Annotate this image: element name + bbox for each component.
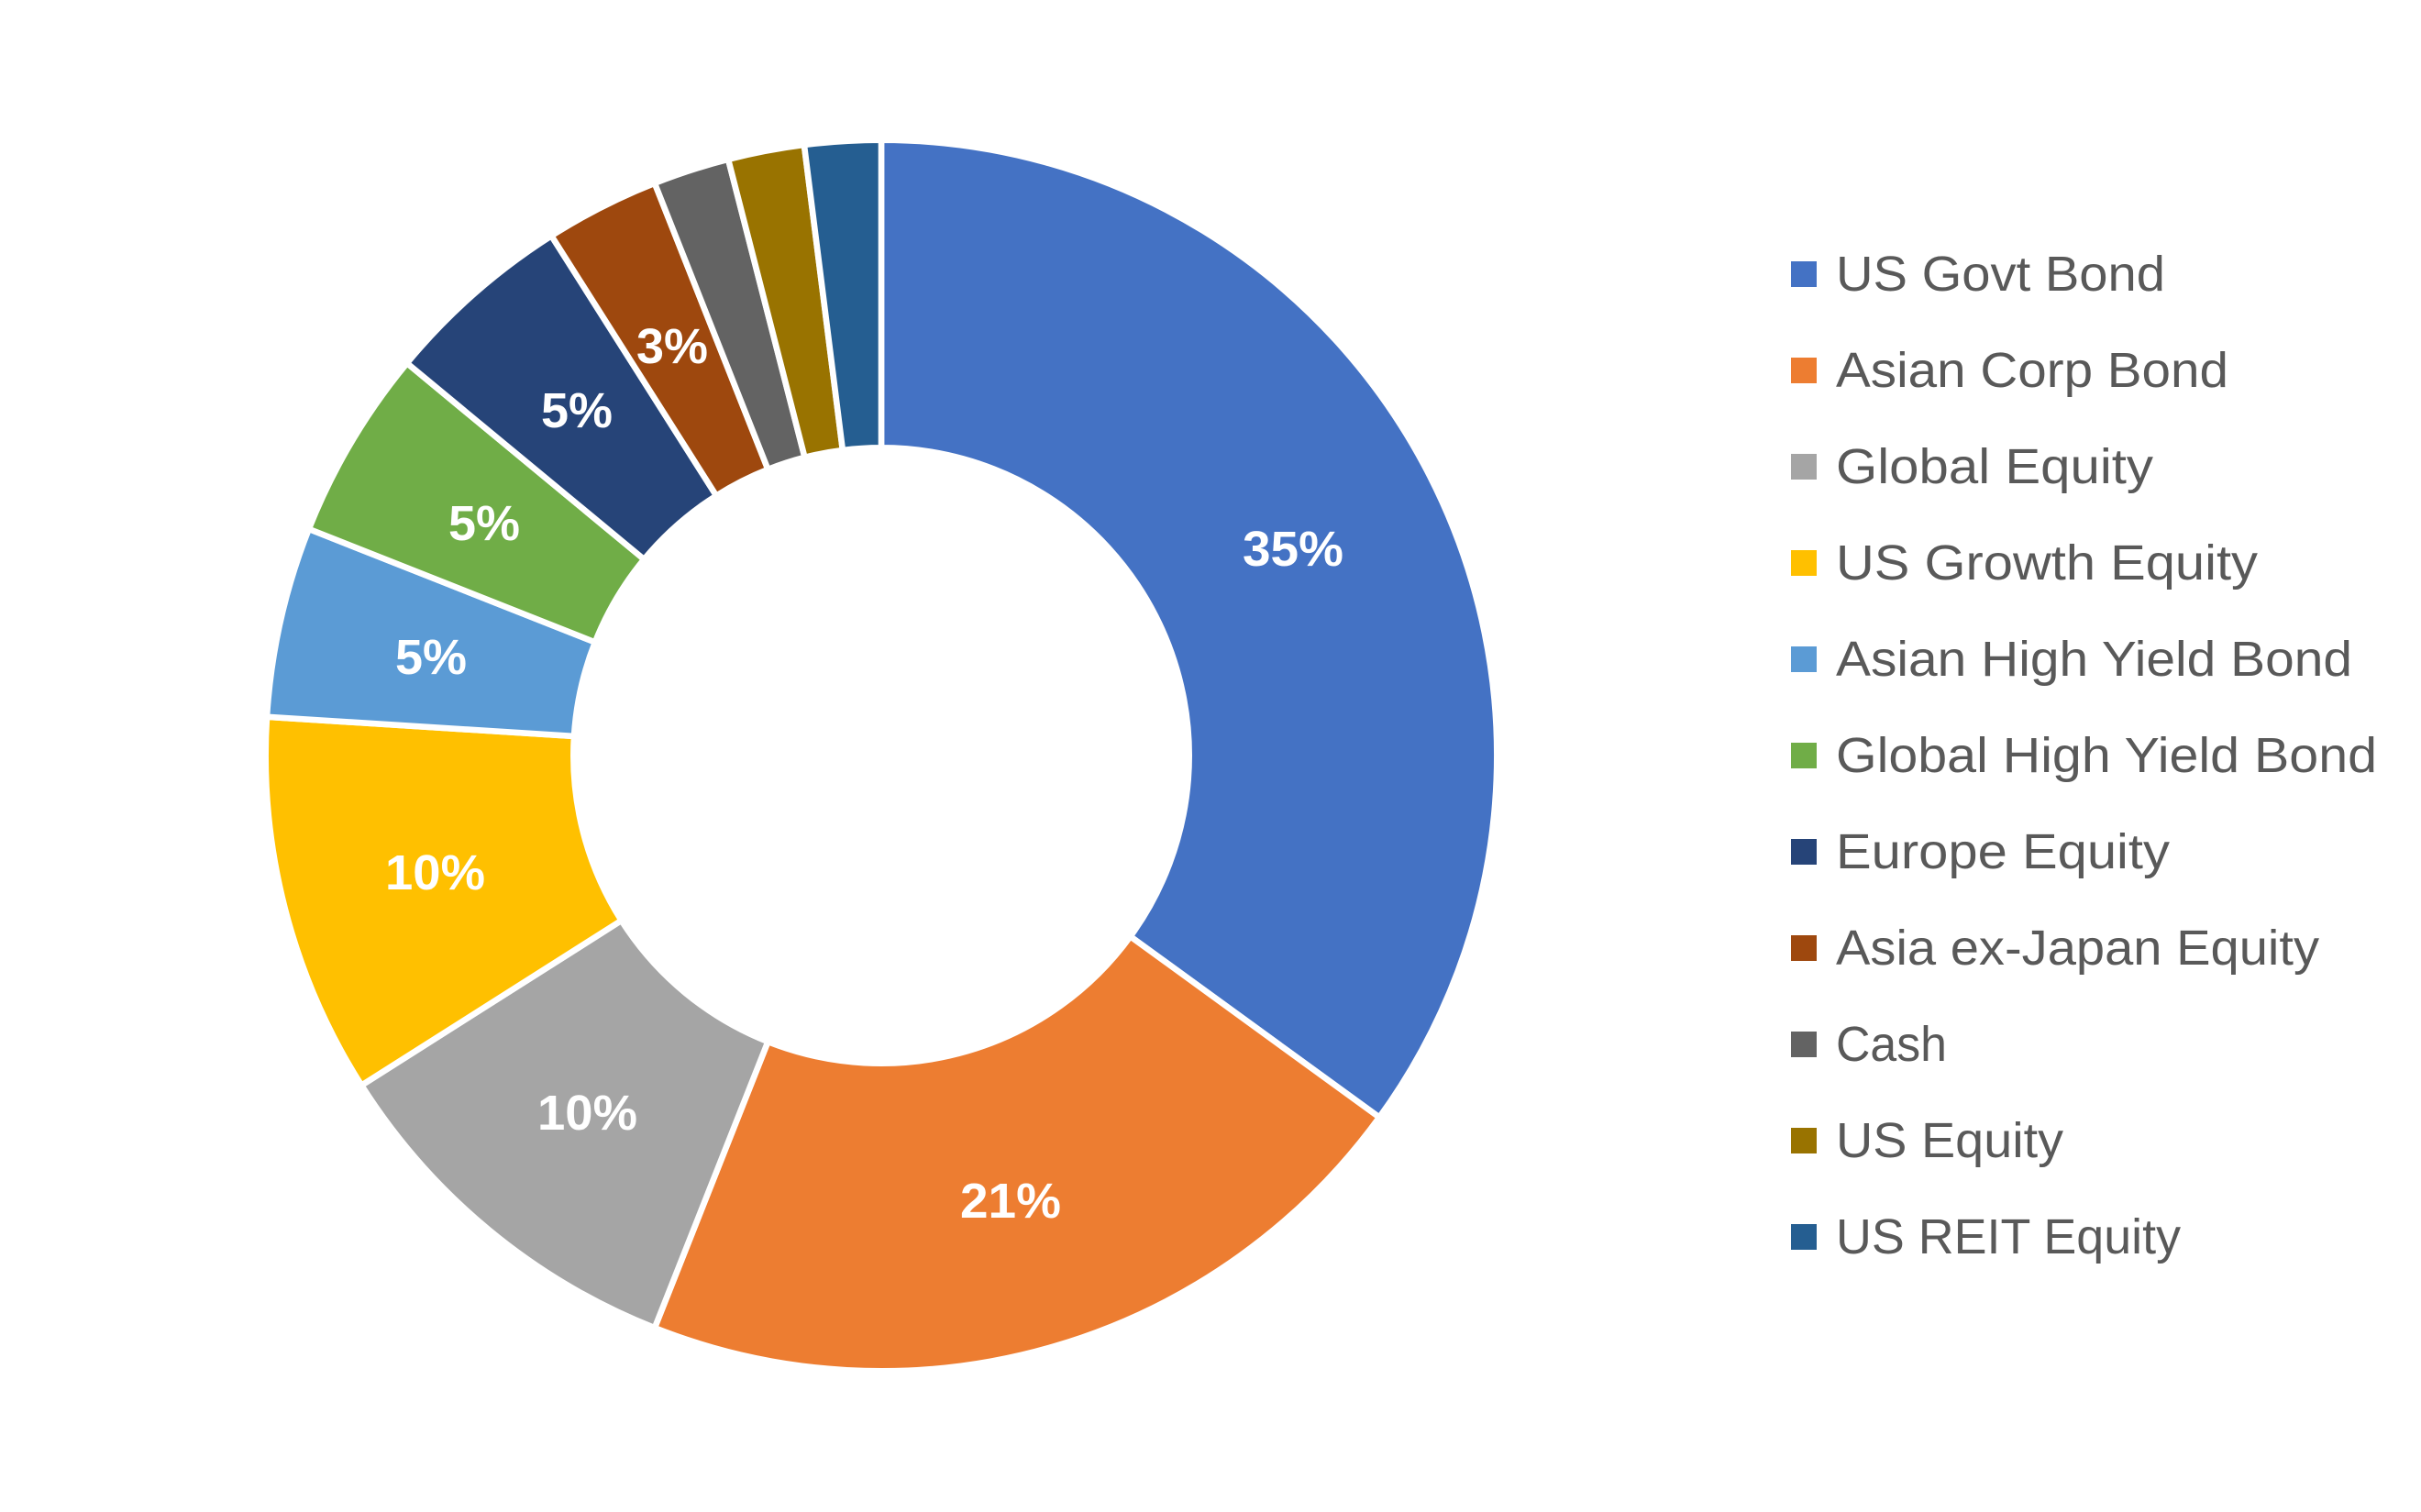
label: 5% light blue: 5%: [395, 630, 467, 685]
legend item: US Growth Equity: US Growth Equity: [1836, 535, 2258, 590]
slice: US Equity 2%: [728, 145, 843, 458]
legend item: Europe Equity: Europe Equity: [1836, 824, 2170, 879]
label: 35%: 35%: [1243, 522, 1343, 577]
label: 10% yellow: 10%: [385, 845, 485, 900]
legend item: US Equity: US Equity: [1836, 1113, 2063, 1168]
legend: [1791, 247, 2377, 1264]
legend item: US REIT Equity: US REIT Equity: [1836, 1209, 2181, 1264]
label: 5% green: 5%: [448, 496, 520, 551]
slice: Global Equity 10%: [361, 921, 768, 1328]
slice: Asia ex-Japan Equity 3%: [551, 183, 768, 496]
slice: Cash 2%: [655, 160, 805, 469]
slice: US Govt Bond 35%: [881, 140, 1497, 1118]
donut chart: [266, 140, 1497, 1371]
label: 21%: 21%: [960, 1174, 1061, 1229]
slice group: donut segments: [266, 140, 1497, 1371]
legend item: Asian Corp Bond: Asian Corp Bond: [1836, 343, 2228, 398]
legend item: Global High Yield Bond: Global High Yield Bond: [1836, 728, 2377, 783]
legend item: US Govt Bond: US Govt Bond: [1836, 247, 2165, 302]
legend item: Cash: Cash: [1836, 1017, 1947, 1072]
label: 10% grey: 10%: [537, 1086, 637, 1141]
slice: US REIT Equity 2%: [804, 140, 881, 450]
label: 5% navy: 5%: [541, 383, 613, 438]
slice: Asian Corp Bond 21%: [655, 936, 1379, 1371]
data labels: [385, 319, 1343, 1229]
legend item: Cash: [1791, 1017, 1947, 1072]
slice: Europe Equity 5%: [407, 236, 716, 559]
legend item: Global Equity: Global Equity: [1836, 439, 2153, 494]
slice: Global High Yield Bond 5%: [309, 363, 644, 642]
legend item: Asia ex-Japan Equity: Asia ex-Japan Equity: [1836, 921, 2319, 976]
slice: Asian High Yield Bond 5%: [267, 529, 595, 736]
label: 3%: 3%: [636, 319, 708, 374]
slice: US Growth Equity 10%: [266, 717, 622, 1086]
legend item: Asian High Yield Bond: Asian High Yield Bond: [1836, 632, 2352, 687]
